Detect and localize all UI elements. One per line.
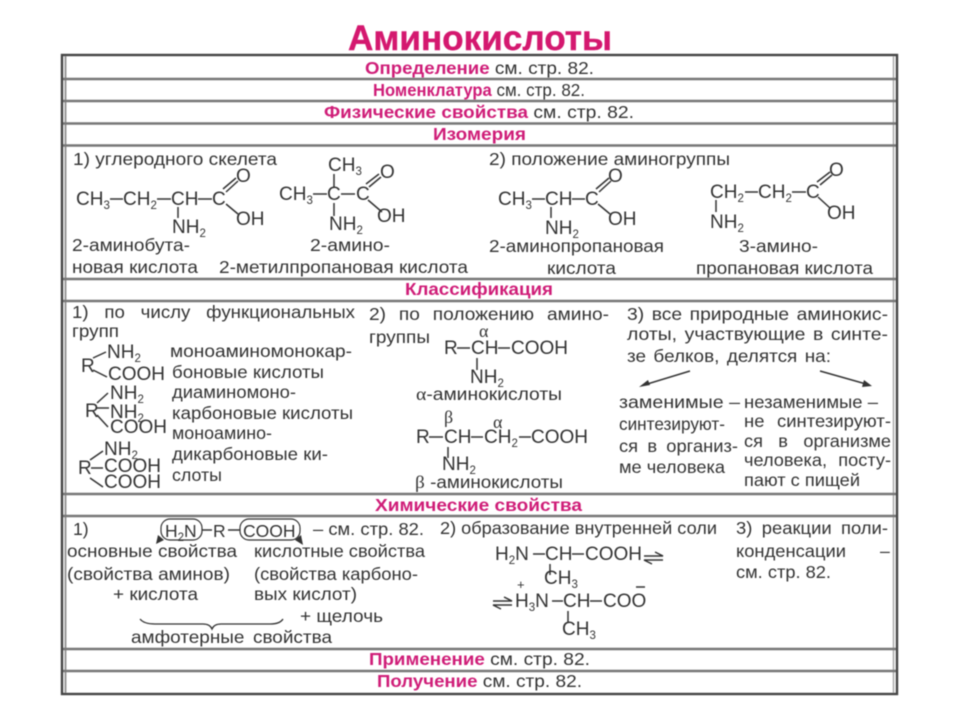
formula: zwitterion: COO (603, 591, 646, 612)
heading: definition: Определение см. стр. 82. (365, 58, 594, 78)
formula: diamino monocarboxylic: COOH (110, 417, 167, 438)
formula: 3-aminopropanoic acid (710, 160, 856, 235)
name: 2-aminobutanoic acid: 2-аминобута- (72, 235, 190, 255)
text: see page 82: – см. стр. 82. (313, 519, 424, 539)
text: essential: человека, посту- (744, 450, 891, 470)
panel: classification by amino group position (369, 304, 609, 492)
text: basic properties: основные свойства (67, 541, 237, 561)
heading: nomenclature: Номенклатура см. стр. 82. (373, 80, 585, 100)
text: type names: боновые кислоты (172, 362, 324, 382)
formula: 2-amino-2-methylpropanoic acid: CH (279, 184, 306, 205)
formula: 3-aminopropanoic acid: 2 (785, 193, 792, 205)
formula: 3-aminopropanoic acid: C (806, 182, 820, 203)
arrow: left (639, 371, 690, 387)
formula: 2-amino-2-methylpropanoic acid: 3 (306, 195, 313, 207)
formula: 2-aminopropanoic acid: CH (498, 189, 525, 210)
formula: 2-aminopropanoic acid: OH (608, 209, 636, 230)
text: all natural amino acids: зе белков, делятся на: (627, 346, 831, 366)
formula: 2-aminobutanoic acid: CH (76, 189, 103, 210)
formula: alanine (495, 544, 663, 591)
label: groups: группы (369, 327, 430, 347)
formula: 2-aminopropanoic acid: CH (545, 189, 572, 210)
formula: monoamino monocarboxylic (81, 342, 165, 385)
heading: preparation: Получение см. стр. 82. (377, 671, 582, 691)
text: acidic properties: (свойства карбоно- (254, 564, 418, 584)
text: amphoteric properties: амфотерные свойства (131, 627, 332, 647)
formula: alanine: N (515, 544, 529, 565)
formula: zwitterion (493, 577, 646, 642)
formula: alanine: 3 (571, 579, 578, 591)
formula: alanine: H (495, 544, 509, 565)
text: essential: пают с пищей (744, 470, 860, 490)
formula: 2-aminopropanoic acid: 3 (525, 200, 532, 212)
formula: 3-aminopropanoic acid: OH (827, 203, 856, 224)
formula: alpha-amino acid: α (479, 321, 489, 341)
text: polycondensation reactions: 3) реакции поли- (736, 518, 888, 538)
formula: diamino monocarboxylic: R (85, 401, 99, 422)
formula: zwitterion: H (515, 591, 529, 612)
text: non-essential: заменимые – (619, 392, 740, 412)
formula: alpha-amino acid (444, 321, 568, 390)
formula: 2-aminopropanoic acid: O (608, 166, 623, 187)
panel: isomerism of amino group position (489, 149, 873, 278)
formula: 2-aminobutanoic acid: 2 (150, 200, 157, 212)
formula: alpha-amino acid: CH (471, 338, 498, 359)
formula: monoamino dicarboxylic: NH (104, 439, 131, 460)
formula: 2-aminobutanoic acid: CH (123, 189, 150, 210)
formula: alanine: 2 (509, 555, 515, 567)
formula: beta-amino acid: 2 (469, 465, 476, 477)
text: essential (744, 392, 891, 490)
label: 1): 1) (73, 519, 89, 539)
formula: 2-aminobutanoic acid: 2 (199, 228, 206, 240)
name: alpha-amino acids: α-аминокислоты (416, 384, 562, 404)
formula: beta-amino acid: NH (442, 454, 469, 475)
label: groups: групп (72, 321, 119, 341)
text: type names: моноаминомонокар- (170, 341, 352, 361)
formula: 2-amino-2-methylpropanoic acid: C (327, 184, 341, 205)
label: by amino group position: 2) по положению амино- (369, 304, 609, 324)
formula: 3-aminopropanoic acid: 2 (737, 193, 744, 205)
formula: 2-aminobutanoic acid: NH (172, 217, 199, 238)
formula: monoamino monocarboxylic: COOH (108, 364, 165, 385)
text: condensation: конденсации (736, 541, 846, 561)
text: acidic properties: вых кислот) (254, 584, 357, 604)
formula: beta-amino acid: β (444, 407, 453, 427)
name: 3-amino-: 3-амино- (739, 236, 818, 256)
dash: – (880, 541, 890, 561)
heading: application: Применение см. стр. 82. (369, 649, 590, 669)
formula: 2-amino-2-methylpropanoic acid: CH (328, 155, 355, 176)
formula: zwitterion: CH (563, 591, 590, 612)
formula: amino acid with circled groups: COOH (243, 521, 296, 541)
formula: 2-aminopropanoic acid: 2 (572, 229, 579, 241)
formula: 2-aminobutanoic acid: CH (171, 189, 198, 210)
text: essential: незаменимые – (744, 392, 878, 412)
panel: amphoteric properties (67, 519, 425, 647)
formula: amino acid with circled groups: N (184, 521, 197, 541)
formula: 3-aminopropanoic acid: NH (710, 212, 737, 233)
text: non-essential: ме человека (619, 457, 725, 477)
formula: 2-amino-2-methylpropanoic acid: C (356, 184, 370, 205)
formula: alanine: CH (545, 544, 572, 565)
formula: 2-amino-2-methylpropanoic acid: OH (377, 206, 406, 227)
formula: beta-amino acid: R (416, 427, 430, 448)
formula: 2-aminopropanoic acid (498, 166, 636, 241)
formula: monoamino dicarboxylic: R (78, 458, 92, 479)
text: all natural amino acids: 3) все природные аминокис- (627, 304, 888, 324)
text: type names: слоты (172, 465, 222, 485)
text: acidic properties (254, 541, 425, 626)
formula: alpha-amino acid: R (444, 338, 458, 359)
formula: 2-amino-2-methylpropanoic acid: 2 (356, 225, 363, 237)
formula: beta-amino acid: COOH (531, 427, 588, 448)
formula: 3-aminopropanoic acid: O (829, 160, 844, 181)
text: see page 82: см. стр. 82. (736, 562, 831, 582)
formula: zwitterion: 3 (589, 630, 596, 642)
formula: monoamino dicarboxylic: COOH (104, 456, 161, 477)
formula: alpha-amino acid: 2 (497, 378, 504, 390)
formula: monoamino dicarboxylic: COOH (104, 472, 161, 493)
text: type names (170, 341, 353, 485)
name: propanoic acid: пропановая кислота (696, 258, 873, 278)
text: non-essential: синтезируют- (619, 414, 725, 434)
text: basic properties: + кислота (113, 584, 198, 604)
formula: beta-amino acid: α (493, 412, 503, 432)
formula: diamino monocarboxylic: NH (110, 402, 137, 423)
heading: classification: Классификация (405, 279, 553, 299)
formula: monoamino monocarboxylic: NH (107, 342, 134, 363)
panel: inner salt formation (440, 518, 717, 642)
formula: 2-aminobutanoic acid: 3 (103, 200, 110, 212)
text: non-essential: ся в организ- (619, 436, 738, 456)
text: all natural amino acids: лоты, участвующие в синте- (627, 324, 888, 344)
formula: 2-amino-2-methylpropanoic acid: O (380, 162, 395, 183)
formula: 3-aminopropanoic acid: 2 (737, 223, 744, 235)
text: type names: моноамино- (172, 423, 272, 443)
name: 2-aminopropanoic: 2-аминопропановая (489, 236, 664, 256)
formula: alanine: COOH (585, 544, 642, 565)
panel: natural amino acids (619, 304, 891, 490)
formula: amino acid with circled groups: 2 (178, 532, 184, 544)
formula: beta-amino acid: 2 (511, 438, 518, 450)
formula: 3-aminopropanoic acid: CH (710, 182, 737, 203)
formula: 2-amino-2-methylpropanoic acid: 3 (355, 166, 362, 178)
title: Аминокислоты (348, 18, 612, 58)
text: type names: диаминомоно- (172, 382, 296, 402)
formula: 2-amino-2-methylpropanoic acid: NH (329, 214, 356, 235)
formula: monoamino monocarboxylic: 2 (134, 353, 141, 365)
text: basic properties (67, 541, 237, 604)
text: non-essential (619, 392, 740, 477)
formula: zwitterion: CH (562, 619, 589, 640)
text: essential: не синтезируют- (744, 411, 891, 431)
name: beta-amino acids: β -аминокислоты (415, 472, 563, 492)
panel: isomerism of carbon skeleton (72, 149, 468, 277)
formula: beta-amino acid (416, 407, 588, 477)
formula: diamino monocarboxylic (85, 383, 167, 438)
text: acidic properties: + щелочь (300, 606, 383, 626)
formula: diamino monocarboxylic: 2 (137, 413, 144, 425)
name: 2-amino-: 2-амино- (310, 235, 390, 255)
text: essential: ся в организме (744, 431, 891, 451)
name: 2-methylpropanoic acid: 2-метилпропановая кислота (219, 257, 468, 277)
formula: zwitterion: 3 (529, 602, 535, 614)
formula: diamino monocarboxylic: NH (110, 383, 137, 404)
formula: 3-aminopropanoic acid: CH (758, 182, 785, 203)
formula: alpha-amino acid: COOH (511, 338, 568, 359)
panel: polycondensation (736, 518, 890, 582)
label: carbon skeleton: 1) углеродного скелета (73, 149, 277, 169)
heading: chemical properties: Химические свойства (375, 495, 582, 515)
table frame (62, 55, 897, 694)
formula: zwitterion: + (517, 577, 525, 592)
formula: amino acid with circled groups: H (165, 521, 178, 541)
name: 2-aminobutanoic acid, second line: новая кислота (72, 257, 198, 277)
formula: beta-amino acid: CH (444, 427, 471, 448)
panel: classification by functional groups (72, 302, 355, 493)
formula: 2-aminopropanoic acid: NH (545, 218, 572, 239)
text: type names: карбоновые кислоты (172, 403, 353, 423)
formula: monoamino dicarboxylic: 2 (131, 450, 138, 462)
formula: diamino monocarboxylic: 2 (137, 394, 144, 406)
formula: 2-aminobutanoic acid (76, 166, 264, 240)
formula: alpha-amino acid: NH (470, 367, 497, 388)
formula: zwitterion: N (535, 591, 549, 612)
name: acid: кислота (547, 258, 616, 278)
formula: 2-aminobutanoic acid: C (212, 189, 226, 210)
brace (140, 619, 283, 629)
formula: amino acid with circled groups: R (213, 521, 226, 541)
formula: alanine: CH (544, 568, 571, 589)
formula: 2-aminopropanoic acid: C (585, 189, 599, 210)
text: type names: дикарбоновые ки- (172, 444, 328, 464)
heading: isomerism: Изомерия (433, 124, 526, 144)
formula: amino acid with circled groups (156, 519, 303, 545)
label: amino group position: 2) положение аминогруппы (489, 149, 730, 169)
formula: 2-aminobutanoic acid: OH (236, 209, 264, 230)
formula: monoamino dicarboxylic (78, 439, 161, 493)
text: all natural amino acids (627, 304, 888, 366)
arrow: right (820, 371, 872, 387)
text: basic properties: (свойства аминов) (67, 564, 230, 584)
formula: 2-amino-2-methylpropanoic acid (279, 155, 406, 237)
heading: physical properties: Физические свойства см. стр. 82. (324, 102, 634, 122)
label: by number of functional groups: 1) по числу функциональных (72, 302, 355, 322)
text: acidic properties: кислотные свойства (254, 541, 425, 561)
formula: beta-amino acid: CH (484, 427, 511, 448)
formula: monoamino monocarboxylic: R (81, 356, 95, 377)
label: inner salt: 2) образование внутренней соли (440, 518, 717, 538)
formula: 2-aminobutanoic acid: O (236, 166, 251, 187)
